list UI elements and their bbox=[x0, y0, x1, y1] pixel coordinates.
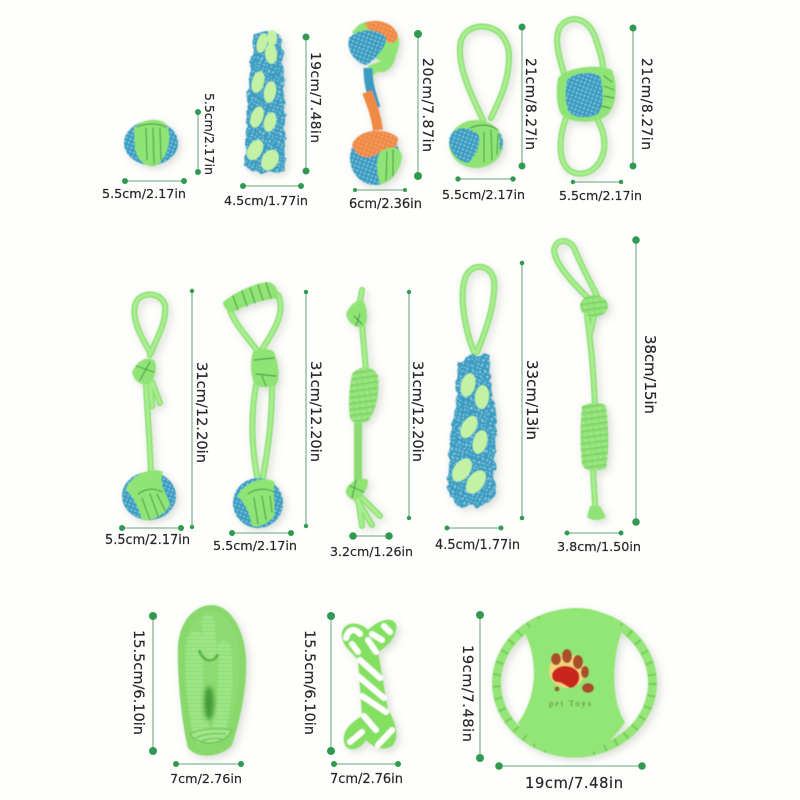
height dimension bbox=[304, 290, 324, 528]
height dimension bbox=[630, 24, 654, 170]
logo: paw print bbox=[549, 649, 594, 693]
height dimension bbox=[632, 236, 659, 526]
height dimension: 19cm/7.48in bbox=[459, 645, 475, 742]
height dimension bbox=[302, 34, 323, 174]
icon: braided stick bbox=[243, 30, 286, 174]
toy 10: long loop rope with dimensions bbox=[554, 236, 659, 555]
width dimension bbox=[349, 188, 422, 212]
height dimension bbox=[459, 611, 484, 762]
icon: long rope bbox=[554, 241, 608, 520]
height dimension: 19cm/7.48in bbox=[307, 52, 323, 143]
width dimension: 4.5cm/1.77in bbox=[435, 538, 520, 553]
toy 1: rope ball with dimensions bbox=[102, 93, 217, 202]
width dimension bbox=[213, 530, 297, 554]
height dimension: 5.5cm/2.17in bbox=[202, 93, 217, 175]
toy 9: braided loop tug with dimensions bbox=[435, 261, 541, 553]
height dimension bbox=[414, 30, 435, 180]
height dimension: 15.5cm/6.10in bbox=[130, 630, 146, 735]
icon: figure-eight rope bbox=[557, 19, 616, 174]
width dimension bbox=[224, 183, 308, 209]
height dimension: 21cm/8.27in bbox=[638, 58, 654, 150]
icon: sandal bbox=[178, 605, 246, 756]
icon: handled rope with ball bbox=[223, 282, 283, 528]
height dimension bbox=[190, 289, 210, 529]
width dimension: 7cm/2.76in bbox=[330, 772, 403, 787]
height dimension: 31cm/12.20in bbox=[193, 362, 210, 463]
width dimension bbox=[330, 761, 403, 787]
width dimension bbox=[105, 525, 190, 548]
width dimension bbox=[435, 526, 520, 553]
toy 12: white green bone with dimensions bbox=[301, 612, 403, 787]
width dimension: 5.5cm/2.17in bbox=[213, 539, 297, 554]
toy 4: loop with ball and dimensions bbox=[442, 24, 538, 202]
toy 8: rope barrel tug with dimensions bbox=[330, 290, 426, 559]
width dimension: 5.5cm/2.17in bbox=[559, 188, 642, 203]
height dimension bbox=[520, 261, 541, 520]
width dimension: 6cm/2.36in bbox=[349, 197, 422, 212]
width dimension: 4.5cm/1.77in bbox=[224, 194, 308, 209]
height dimension: 33cm/13in bbox=[523, 360, 541, 440]
icon: loop ball bbox=[449, 27, 509, 168]
toy 2: braided stick with dimensions bbox=[224, 30, 323, 209]
icon: braided loop stick bbox=[447, 267, 496, 507]
icon: rope with ball bbox=[122, 294, 176, 520]
height dimension bbox=[130, 612, 157, 755]
width dimension bbox=[170, 761, 244, 787]
height dimension bbox=[407, 290, 426, 520]
toy 3: orange blue dumbbell with dimensions bbox=[348, 21, 435, 212]
width dimension: 19cm/7.48in bbox=[525, 775, 623, 792]
width dimension bbox=[330, 532, 413, 559]
icon: barrel rope bbox=[346, 290, 380, 526]
toy 6: knotted rope ball with dimensions bbox=[105, 289, 210, 548]
icon: small ball bbox=[124, 120, 178, 166]
height dimension: 20cm/7.87in bbox=[419, 58, 435, 152]
toy 5: figure-eight tug with dimensions bbox=[557, 19, 654, 203]
height dimension: 15.5cm/6.10in bbox=[301, 630, 317, 735]
height dimension: 21cm/8.27in bbox=[522, 58, 538, 150]
toy 13: flying disc with dimensions bbox=[459, 608, 652, 792]
height dimension: 38cm/15in bbox=[641, 335, 659, 414]
width dimension: 5.5cm/2.17in bbox=[442, 187, 525, 202]
width dimension bbox=[442, 176, 525, 202]
width dimension bbox=[557, 530, 641, 555]
logo text: pet Toys bbox=[549, 698, 591, 708]
width dimension bbox=[559, 180, 642, 203]
icon: bone rope bbox=[342, 620, 396, 749]
height dimension: 31cm/12.20in bbox=[307, 361, 324, 462]
height dimension bbox=[518, 24, 538, 170]
width dimension bbox=[495, 762, 646, 792]
width dimension: 3.8cm/1.50in bbox=[557, 540, 641, 555]
toy 11: rope sandal with dimensions bbox=[130, 605, 246, 787]
width dimension: 5.5cm/2.17in bbox=[105, 533, 190, 548]
height dimension: 31cm/12.20in bbox=[409, 361, 426, 462]
toy 7: handle rope ball with dimensions bbox=[213, 282, 324, 554]
height dimension bbox=[301, 612, 335, 755]
icon: flying disc bbox=[496, 608, 652, 757]
width dimension: 5.5cm/2.17in bbox=[102, 187, 186, 202]
width dimension: 7cm/2.76in bbox=[170, 772, 242, 787]
width dimension: 3.2cm/1.26in bbox=[330, 544, 413, 559]
icon: dumbbell bbox=[348, 21, 402, 185]
